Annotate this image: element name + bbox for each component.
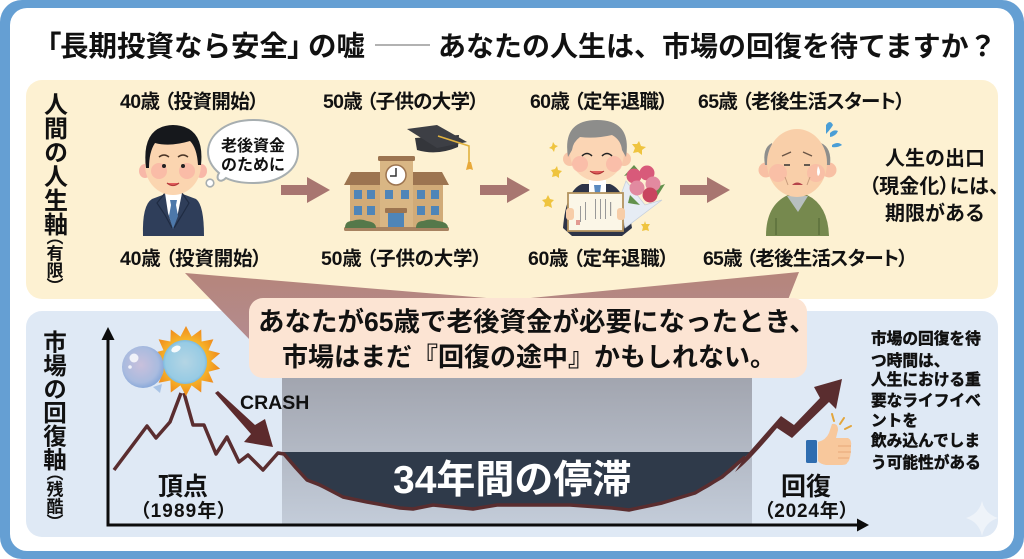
heading: market recovery axis: （残酷） (44, 472, 63, 523)
bottom age labels: 60歳 （定年退職） (528, 247, 669, 270)
icon: bursting bubble (122, 326, 220, 396)
bottom age labels (120, 247, 908, 270)
thought bubble: for retirement funds: のために (221, 156, 285, 174)
label: recovery 2024 (764, 473, 849, 522)
icon: businessman at 40 (139, 125, 207, 236)
icon: school and graduation cap (344, 125, 473, 231)
callout (249, 298, 816, 378)
chart axes (102, 327, 869, 532)
bottom age labels: 50歳 （子供の大学） (321, 247, 482, 270)
market price line (114, 379, 842, 510)
title: 「 (33, 31, 62, 63)
side note: life exit has a deadline: （現金化）には、 (869, 175, 999, 198)
top age labels: 60歳 （定年退職） (530, 90, 668, 113)
side note: waiting time swallows life events: 人生における重 (871, 371, 981, 389)
dark stagnation band (282, 450, 752, 510)
title (33, 31, 997, 63)
icon: thumbs up (806, 414, 851, 465)
callout: 市場はまだ『回復の途中』かもしれない。 (282, 342, 776, 372)
top age labels: 50歳 （子供の大学） (323, 90, 479, 113)
icon: retiree with certificate and flowers (542, 120, 665, 236)
heading: market recovery axis: 市場の回復軸 (40, 330, 67, 471)
callout: あなたが65歳で老後資金が必要になったとき、 (258, 307, 816, 337)
title: 長期投資なら安全 (60, 31, 289, 63)
funnel connecting the two axes (185, 272, 799, 345)
icon: worried elderly man (758, 122, 842, 236)
heading: human life axis: 人間の人生軸 (40, 92, 68, 236)
side note: waiting time swallows life events: 飲み込んでしま (871, 432, 980, 450)
thought bubble: for retirement funds: 老後資金 (221, 136, 285, 155)
label: 34 years of stagnation: 34年間の停滞 (393, 459, 631, 502)
side note: waiting time swallows life events: う可能性がある (871, 453, 981, 472)
panel: market recovery axis (26, 311, 998, 537)
label: peak 1989 (140, 473, 227, 522)
label: peak 1989: 頂点 (158, 473, 208, 501)
side note: waiting time swallows life events (871, 329, 981, 472)
side note: life exit has a deadline (869, 147, 999, 225)
thought bubble: for retirement funds (206, 120, 298, 187)
heading: human life axis: （有限） (44, 236, 63, 287)
top age labels: 65歳 （老後生活スタート） (698, 91, 905, 113)
recovery arrow (735, 379, 842, 472)
label: peak 1989: （1989年） (140, 499, 227, 522)
side note: waiting time swallows life events: 市場の回復を待 (871, 329, 981, 348)
label: recovery 2024: 回復 (781, 473, 831, 501)
side note: waiting time swallows life events: ントを (871, 412, 918, 430)
title: 」 (287, 31, 316, 63)
panel: human life axis (26, 80, 999, 299)
side note: waiting time swallows life events: 要なライフイベ (871, 392, 981, 410)
stagnation zone (282, 370, 752, 524)
side note: life exit has a deadline: 人生の出口 (885, 147, 985, 170)
top age labels (120, 90, 905, 113)
label: recovery 2024: （2024年） (764, 499, 849, 522)
arrow 1 (281, 177, 330, 203)
label: crash: CRASH (240, 392, 309, 414)
top age labels: 40歳 （投資開始） (120, 91, 259, 113)
title: の嘘 (308, 31, 365, 63)
side note: life exit has a deadline: 期限がある (885, 201, 985, 225)
bottom age labels: 40歳 （投資開始） (120, 248, 262, 270)
title: あなたの人生は、市場の回復を待てますか？ (438, 31, 997, 62)
side note: waiting time swallows life events: つ時間は、 (871, 352, 949, 370)
bottom age labels: 65歳 （老後生活スタート） (703, 248, 908, 270)
arrow 3 (680, 177, 730, 203)
arrow 2 (480, 177, 530, 203)
crash arrow (215, 391, 273, 447)
sparkle (966, 501, 998, 536)
